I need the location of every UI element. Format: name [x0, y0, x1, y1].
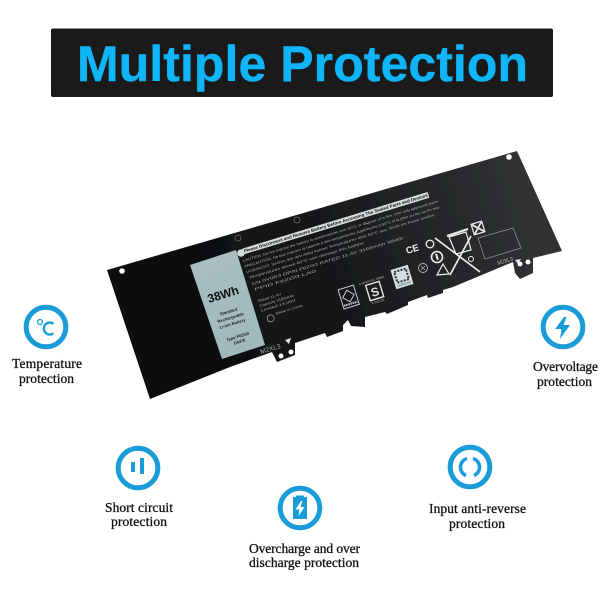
- title banner: [51, 28, 553, 97]
- warning stripe and caution text: Please Disconnect and Remove Battery Before Accessing The Sealed Parts and Devices: [243, 192, 429, 254]
- feature: short circuit protection: [105, 448, 173, 529]
- silver capacity label: [190, 250, 265, 359]
- feature: input anti-reverse protection: [429, 447, 526, 531]
- certification marks: S: [369, 284, 381, 300]
- icon: reverse arrows: [450, 447, 490, 487]
- label: protection: [537, 374, 592, 389]
- warning stripe and caution text: [239, 190, 458, 325]
- icon: circuit break: [118, 448, 158, 488]
- label: Overcharge and over: [249, 541, 360, 556]
- icon: battery bolt: [280, 488, 320, 528]
- warning stripe and caution text: Made in China: [275, 304, 303, 316]
- label: protection: [449, 516, 505, 531]
- model marking left: [260, 338, 291, 356]
- silver capacity label: 38Wh: [206, 283, 240, 306]
- silver capacity label: Standard: [219, 306, 238, 317]
- warning stripe and caution text: CN 0V0R3 DP/N F62G0 RATED 11.4V 3166mAh 38Wh: [251, 236, 404, 286]
- silver capacity label: Rechargeable: [217, 311, 245, 324]
- label: Overvoltage: [533, 359, 598, 374]
- battery mounting holes: [119, 154, 530, 358]
- regulatory symbols: [405, 221, 485, 275]
- silver capacity label: Li-ion Battery: [219, 317, 247, 330]
- label: protection: [111, 514, 167, 529]
- icon: thermometer degrees: [26, 307, 66, 347]
- regulatory symbols: CE: [405, 242, 421, 257]
- title text: Multiple Protection: [77, 36, 528, 92]
- certification marks: S-58066-IEC 60950: [358, 275, 385, 286]
- icon: lightning bolt: [543, 307, 583, 347]
- warning stripe and caution text: Limited 13.05V: [260, 298, 297, 313]
- silver capacity label: DAFI0: [233, 337, 247, 346]
- certification marks: E-302130: [371, 298, 385, 305]
- label: Short circuit: [105, 500, 173, 515]
- label: protection: [19, 371, 74, 386]
- silver capacity label: Type:F62G0: [226, 331, 250, 342]
- label: Input anti-reverse: [429, 501, 526, 516]
- caution icon: [237, 249, 245, 257]
- label: discharge protection: [249, 555, 359, 570]
- warning stripe and caution text: Rated 11.4V: [258, 292, 282, 303]
- feature: overvoltage protection: [533, 307, 598, 389]
- model marking right: M2XL3: [497, 256, 514, 267]
- warning stripe and caution text: PRÉCAUTION: Ne pas exposer la batterie à des températures supérieures à 60°C ni la jeter au feu ou en eau.: [244, 204, 441, 269]
- battery photo: [107, 151, 562, 399]
- dashed serial box: [478, 228, 521, 259]
- warning stripe and caution text: Capacity 3166mAh: [259, 294, 295, 308]
- warning stripe and caution text: CAUTION: Do not expose the battery to temperatures over 60°C or dispose of in fire. Use only approved parts.: [242, 199, 439, 263]
- warning stripe and caution text: PPID F62G0 LA0: [254, 269, 316, 292]
- label: Temperature: [12, 356, 82, 371]
- battery body: [107, 151, 562, 399]
- feature: overcharge and over discharge protection: [249, 488, 360, 570]
- feature: temperature protection: [12, 307, 82, 386]
- certification marks: [338, 265, 414, 309]
- warning stripe and caution text: VORSICHT: Setzen Sie den Akku keinen Temperaturen über 60°C aus. Nicht ins Feuer werfen.: [246, 213, 436, 274]
- screw marks: [235, 217, 300, 241]
- warning stripe and caution text: Temperatures above 60°C can damage this battery: [248, 241, 365, 280]
- model marking left: M2XL3: [260, 343, 282, 356]
